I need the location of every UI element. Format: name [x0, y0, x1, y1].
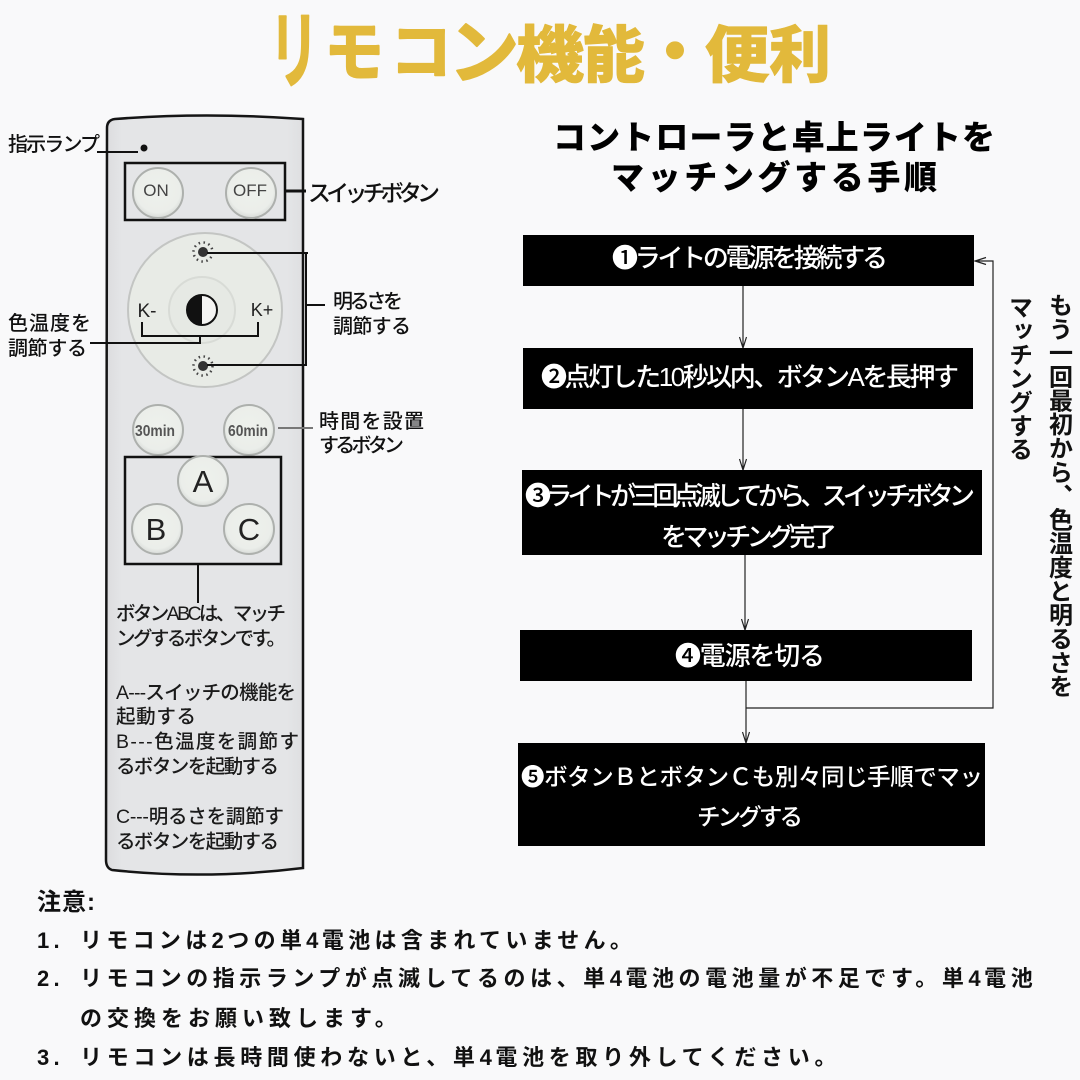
step 2 [523, 348, 973, 409]
panel: remote control diagram [8, 116, 440, 875]
switch buttons: OFF [233, 181, 267, 200]
step 3: をマッチング完了 [661, 522, 837, 552]
loop-back note (vertical text): マッチングする [1004, 295, 1032, 461]
title [270, 5, 831, 99]
title: 便 [704, 21, 770, 91]
heading: matching procedure: マッチングする手順 [611, 159, 937, 196]
brightness annotation [207, 253, 411, 365]
colour temperature annotation: 調節する [8, 337, 87, 360]
notes: 注意: [37, 889, 96, 916]
brightness annotation: 調節する [333, 315, 411, 338]
step 1 [523, 235, 974, 286]
timer buttons: 時間を設置 [319, 410, 424, 433]
notes: の交換をお願い致します。 [80, 1006, 402, 1031]
matching button description: ングするボタンです。 [116, 628, 286, 650]
notes: リモコンの指示ランプが点滅してるのは、単4電池の電池量が不足です。単4電池 [80, 966, 1037, 991]
notes: リモコンは長時間使わないと、単4電池を取り外してください。 [80, 1045, 841, 1070]
title: コ [390, 18, 452, 88]
matching button description: るボタンを起動する [116, 831, 279, 853]
step 3 [522, 470, 982, 555]
matching buttons A B C [125, 456, 281, 603]
matching button description [116, 603, 299, 853]
step 1: ❶ライトの電源を接続する [612, 243, 888, 273]
title: ン [449, 14, 519, 92]
arrow: step 3 to 4 [742, 555, 748, 630]
timer buttons [133, 405, 424, 457]
step 5 [518, 743, 985, 846]
control dial: K- [138, 301, 156, 322]
notes: 2. [37, 966, 64, 991]
step 2: ❷点灯した10秒以内、ボタンAを長押す [541, 362, 959, 392]
control dial [128, 233, 282, 387]
step 4: ❹電源を切る [675, 641, 825, 671]
flowchart [518, 235, 993, 846]
switch buttons: ON [143, 181, 169, 200]
notes: リモコンは2つの単4電池は含まれていません。 [80, 928, 636, 953]
matching button description: A---スイッチの機能を [116, 682, 296, 704]
heading: matching procedure: コントローラと卓上ライトを [553, 119, 995, 156]
notes: 1. [37, 928, 64, 953]
arrow: loop back to step 1 [746, 258, 993, 708]
matching button description: るボタンを起動する [116, 756, 279, 778]
switch buttons: スイッチボタン [308, 180, 440, 206]
brightness annotation: 明るさを [333, 290, 403, 313]
matching button description: ボタンABCは、マッチ [116, 603, 286, 625]
matching buttons A B C: C [238, 512, 260, 547]
title: 機 [516, 21, 584, 90]
arrow: step 1 to 2 [740, 286, 746, 348]
colour temperature annotation: 色温度を [8, 312, 91, 335]
colour temperature annotation [8, 312, 258, 360]
arrow: step 4 to 5 [742, 681, 750, 743]
timer buttons: するボタン [319, 434, 404, 457]
remote body [106, 116, 303, 875]
control dial: K+ [251, 300, 273, 320]
timer buttons: 30min [135, 423, 175, 440]
step 3: ❸ライトが三回点滅してから、スイッチボタン [525, 481, 975, 511]
matching button description: B---色温度を調節す [116, 731, 299, 753]
indicator lamp label [8, 133, 148, 156]
notes [37, 889, 1037, 1070]
title: 利 [769, 22, 831, 91]
step 5: ❺ボタンＢとボタンＣも別々同じ手順でマッ [521, 764, 983, 790]
matching buttons A B C: B [146, 512, 166, 547]
indicator lamp label: 指示ランプ [8, 133, 100, 156]
timer buttons: 60min [228, 423, 268, 440]
step 4 [520, 630, 972, 681]
heading: matching procedure [553, 119, 995, 196]
matching button description: 起動する [116, 706, 196, 728]
step 5: チングする [697, 804, 803, 830]
switch buttons [125, 163, 440, 220]
title: モ [324, 16, 384, 90]
title: 能 [583, 22, 645, 91]
notes: 3. [37, 1045, 64, 1070]
arrow: step 2 to 3 [740, 409, 746, 470]
matching button description: C---明るさを調節す [116, 806, 284, 828]
loop-back note (vertical text) [1004, 293, 1072, 698]
title: リ [270, 5, 318, 99]
title: ・ [644, 19, 706, 88]
matching buttons A B C: A [193, 464, 214, 499]
loop-back note (vertical text): もう一回最初から、色温度と明るさを [1044, 293, 1072, 698]
